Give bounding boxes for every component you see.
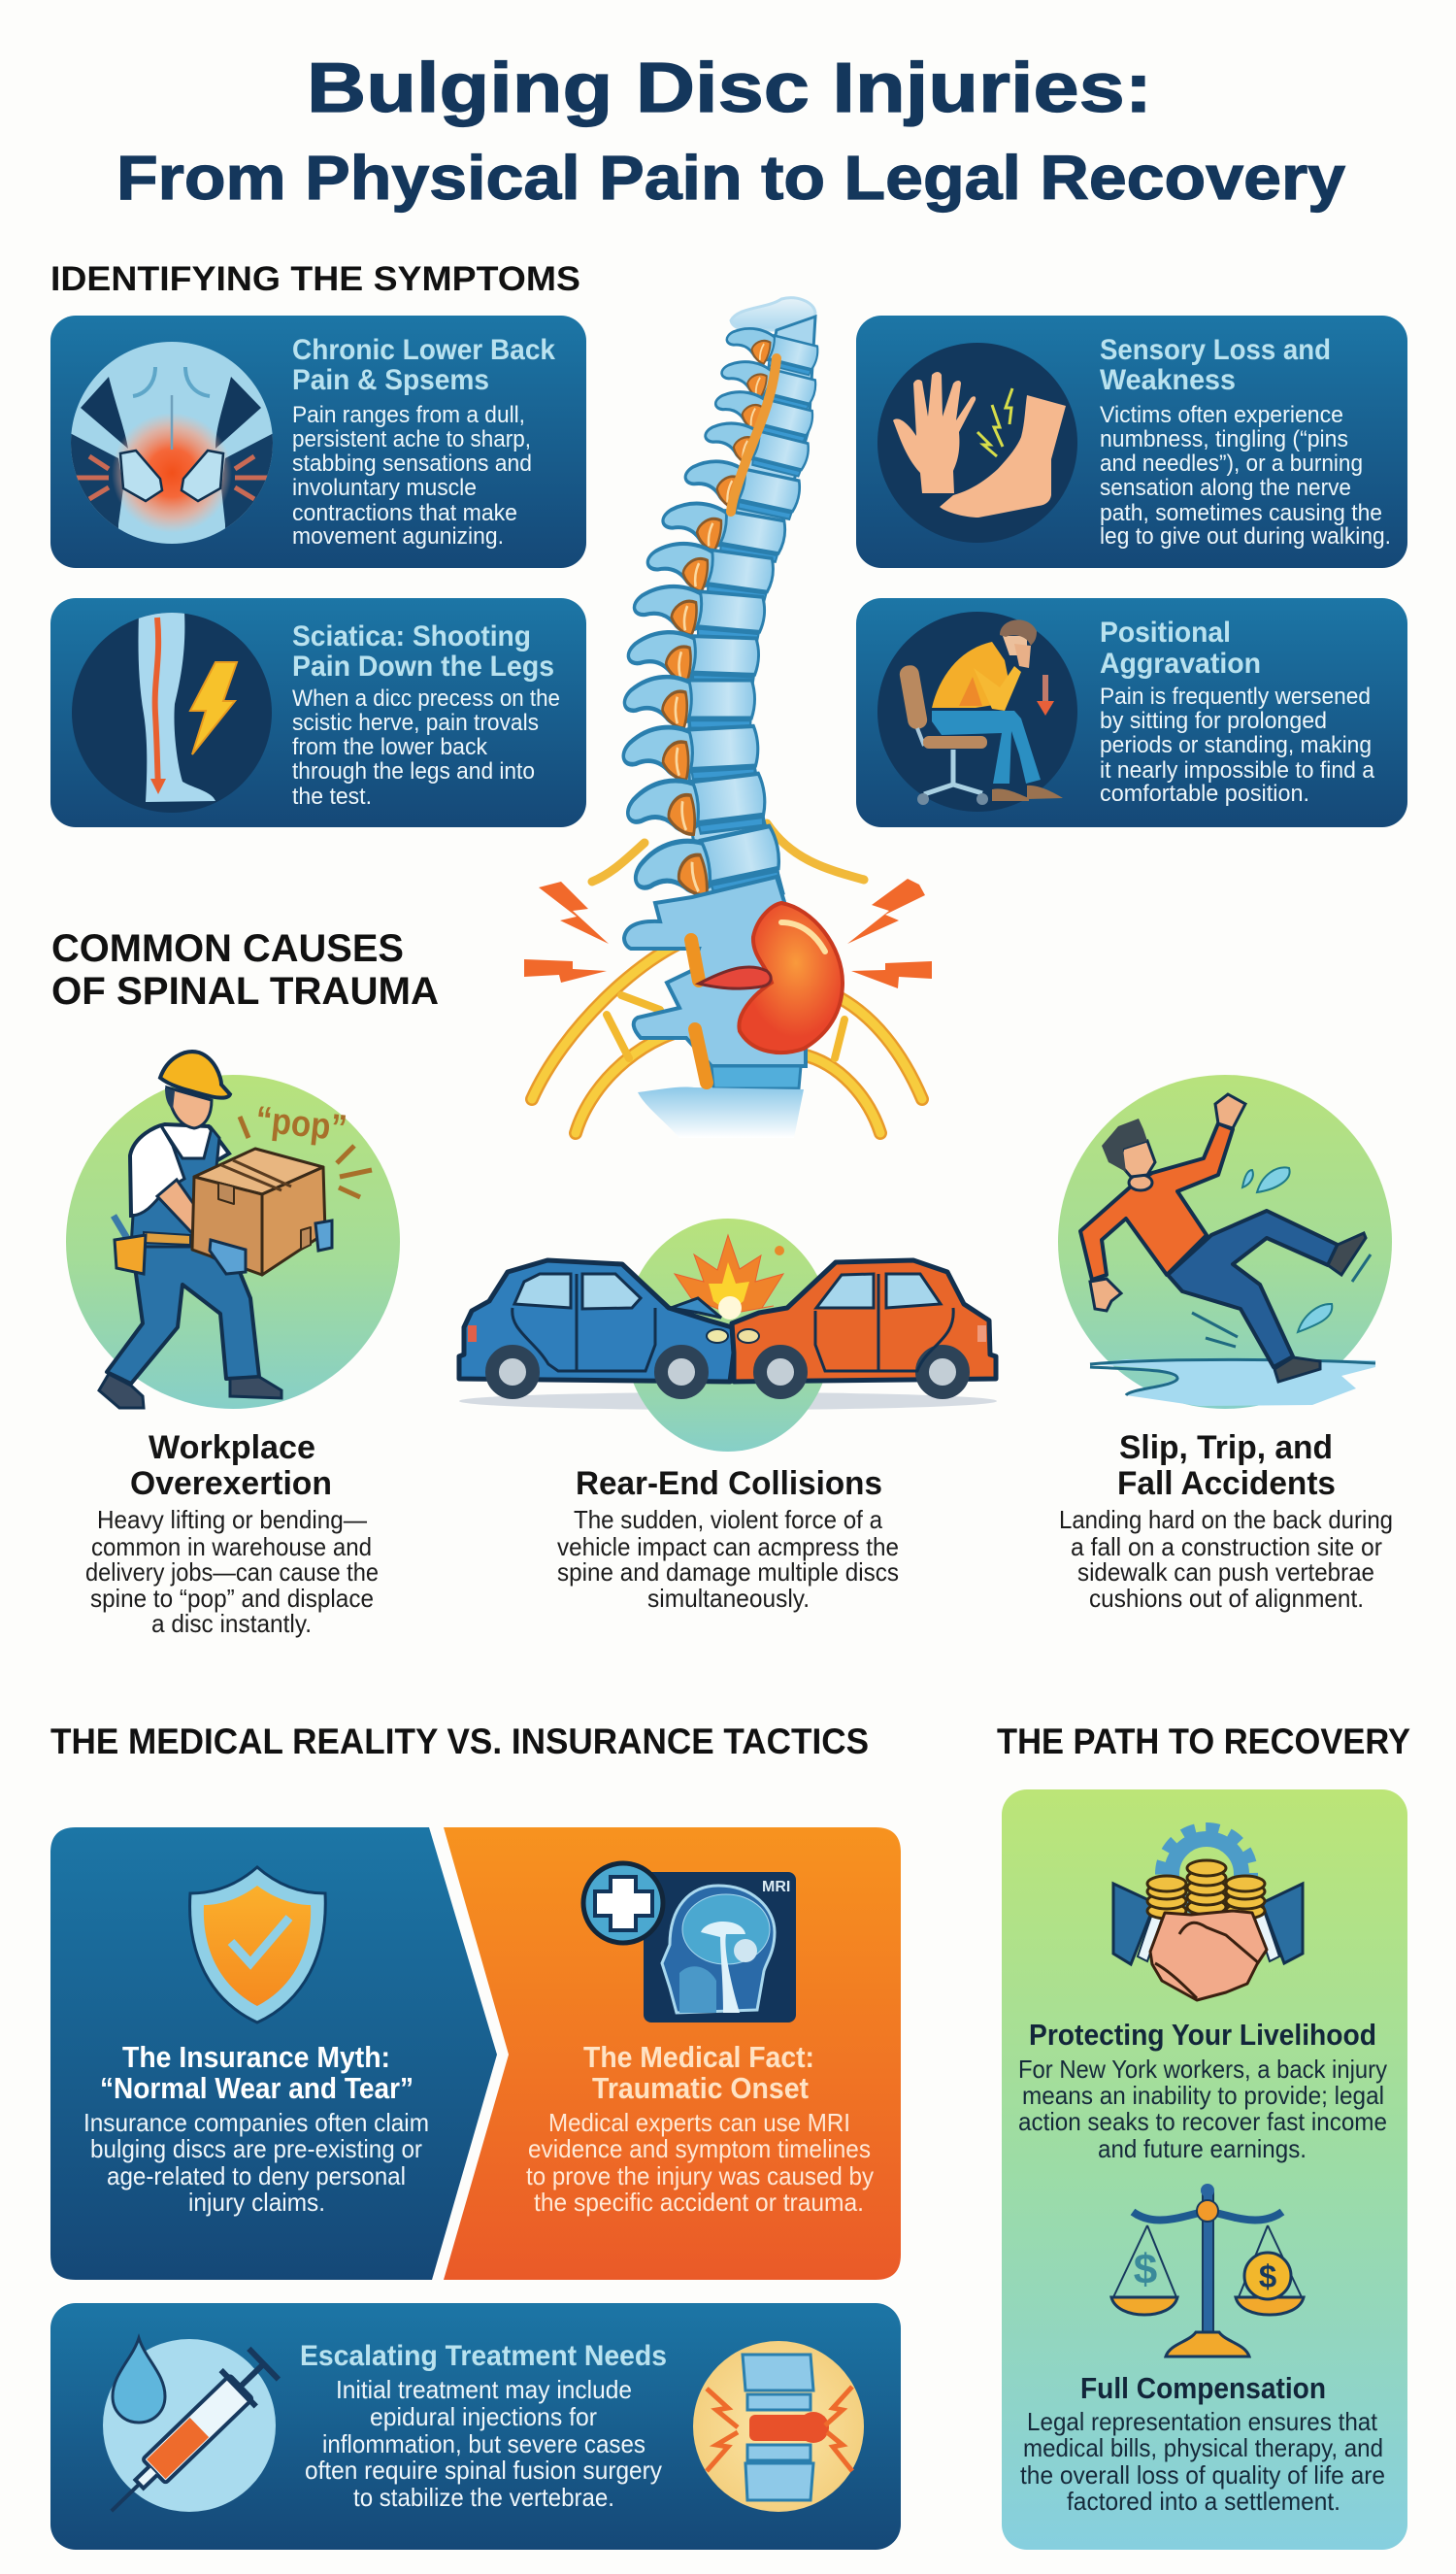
recovery text: For New York workers, a back injury [1018,2055,1387,2084]
card text: sensation along the nerve [1100,475,1351,501]
card text: When a dicc precess on the [292,685,560,712]
fact text: to prove the injury was caused by [526,2161,874,2190]
card text: persistent ache to sharp, [292,426,531,452]
cause: workplace overexertion: delivery jobs—can cause the [85,1557,379,1587]
hard hat [160,1052,230,1098]
cause: workplace overexertion: Workplace [149,1429,315,1466]
strain marks [240,1117,372,1197]
disc tongue [699,967,771,988]
lower disc ring [711,1066,801,1088]
torso and arms [1080,1123,1233,1280]
icon: mri scan: MRI [762,1879,790,1895]
icon: shield with check [190,1867,325,2022]
heading: medical reality vs insurance: THE MEDICAL REALITY VS. INSURANCE TACTICS [50,1722,869,1761]
cause: rear-end collisions: Rear-End Collisions [576,1465,882,1502]
card heading: Sensory Loss and [1100,334,1331,366]
box [192,1149,325,1275]
orange car lights [977,1325,986,1342]
panel: path to recovery [1002,1789,1407,2550]
card text: contractions that make [292,500,517,526]
puddle [1090,1359,1375,1406]
title: From Physical Pain to Legal Recovery [116,143,1345,213]
hair [1102,1119,1147,1172]
card text: Pain is frequently wersened [1100,684,1371,710]
treatment heading: Escalating Treatment Needs [300,2340,667,2372]
motion lines [1192,1254,1371,1347]
card heading: Chronic Lower Back [292,334,555,366]
orange car [732,1260,996,1382]
debris dot [775,1246,784,1255]
blue car lights [468,1325,477,1342]
treatment text: Initial treatment may include [336,2375,632,2404]
fact heading: The Medical Fact: [583,2040,814,2074]
illustration: workplace overexertion [66,1052,400,1409]
card heading: Pain & Spsems [292,364,489,396]
card heading: Sciatica: Shooting [292,620,531,652]
cause: slip, trip and fall: sidewalk can push vertebrae [1077,1557,1374,1587]
blue car [459,1260,734,1382]
treatment text: inflommation, but severe cases [322,2429,645,2458]
bulge highlight [781,922,825,952]
cause: rear-end collisions [557,1465,899,1613]
card text: Pain ranges from a dull, [292,402,525,428]
lower lumbar [624,877,806,1066]
cause: slip, trip and fall: Landing hard on the back during [1059,1505,1393,1534]
treatment text [305,2375,662,2512]
spinal cord [731,358,777,512]
card heading [1100,617,1261,680]
shoes [1274,1233,1366,1382]
illustration: spine with bulging disc [524,298,932,1138]
panel: medical fact [444,1827,901,2280]
card text [292,685,560,810]
myth heading: The Insurance Myth: [122,2040,390,2074]
card heading: Aggravation [1100,648,1261,680]
card text: the test. [292,784,372,810]
door lines [513,1274,953,1371]
fact heading: Traumatic Onset [592,2071,809,2105]
gloves [210,1220,332,1274]
panel: sensory loss [856,316,1407,568]
card text: numbness, tingling (“pins [1100,426,1348,452]
lightning bolts [524,879,932,988]
cause: workplace overexertion: spine to “pop” and displace [90,1584,374,1613]
card text: and needles”), or a burning [1100,451,1363,477]
recovery heading: Protecting Your Livelihood [1029,2018,1376,2052]
card text: by sitting for prolonged [1100,708,1327,734]
panel: escalating treatment [50,2303,901,2550]
shadow [459,1392,997,1410]
crumpled hood [671,1298,721,1318]
fact text: the specific accident or trauma. [534,2188,864,2217]
fact heading [583,2040,814,2105]
title [116,50,1345,213]
heading: common causes [51,927,439,1013]
orange root [691,940,707,1083]
myth text: bulging discs are pre-existing or [90,2134,422,2163]
icon: lower back with glowing pain [71,342,273,544]
cause: rear-end collisions: spine and damage multiple discs [557,1557,899,1587]
card text: path, sometimes causing the [1100,500,1382,526]
vertebrae [622,317,820,909]
blue car windows [514,1274,641,1309]
icon: leg with lightning [72,612,272,813]
cause: slip, trip and fall: cushions out of alignment. [1089,1584,1364,1613]
compensation text: medical bills, physical therapy, and [1023,2433,1383,2462]
card text [1100,402,1391,550]
illustration: slip and fall [1058,1075,1392,1409]
icon: person hunched on chair [877,612,1077,812]
treatment text: often require spinal fusion surgery [305,2456,662,2485]
cause: rear-end collisions: The sudden, violent force of a [574,1505,882,1534]
card text: Victims often experience [1100,402,1343,428]
myth text: injury claims. [188,2188,325,2217]
compensation heading: Full Compensation [1080,2371,1326,2405]
worker pants [107,1245,259,1384]
panel: chronic lower back pain [50,316,586,568]
recovery text: means an inability to provide; legal [1022,2081,1384,2110]
myth text: age-related to deny personal [107,2161,406,2190]
treatment text: epidural injections for [370,2402,597,2431]
fact text: Medical experts can use MRI [548,2108,850,2137]
fact text: evidence and symptom timelines [528,2134,871,2163]
card text [292,402,532,550]
treatment text: to stabilize the vertebrae. [353,2483,614,2512]
herniated bulge [739,903,843,1053]
heading: identifying the symptoms: IDENTIFYING THE SYMPTOMS [50,260,580,298]
card heading: Positional [1100,617,1231,649]
card heading [292,334,555,396]
icon: mri scan [583,1863,796,2022]
card text: scistic herve, pain trovals [292,710,539,736]
card text: involuntary muscle [292,475,477,501]
neck [1129,1175,1152,1190]
cause: slip, trip and fall [1059,1429,1393,1613]
head [167,1087,212,1128]
compensation text [1020,2407,1385,2516]
cause: slip, trip and fall: Slip, Trip, and [1119,1429,1333,1466]
wheels [492,1352,963,1392]
card text: comfortable position. [1100,781,1309,807]
heading: common causes: OF SPINAL TRAUMA [51,970,439,1013]
icon: balance scales: $ [1134,2246,1157,2293]
cause: workplace overexertion: Heavy lifting or bending— [97,1505,367,1534]
icon: syringe and drop [94,2338,281,2529]
icon: spinal fusion [693,2341,864,2512]
recovery text [1018,2055,1387,2163]
overalls bib [131,1124,219,1247]
card text: it nearly impossible to find a [1100,757,1375,784]
card text: leg to give out during walking. [1100,523,1391,550]
cause: workplace overexertion: common in warehouse and [91,1532,372,1561]
panel: insurance myth [50,1827,497,2280]
icon: balance scales: $ [1259,2258,1276,2294]
cause: slip, trip and fall: Fall Accidents [1117,1465,1336,1502]
pop callout: “pop” [253,1099,348,1150]
recovery text: action seaks to recover fast income [1018,2107,1387,2136]
card text: movement agunizing. [292,523,504,550]
hands [1090,1094,1245,1311]
card heading [1100,334,1331,396]
cause: rear-end collisions: vehicle impact can acmpress the [557,1532,899,1561]
card text [1100,684,1375,807]
worker shirt [130,1124,229,1216]
nerves [532,823,922,1133]
myth heading: “Normal Wear and Tear” [100,2071,414,2105]
belt and pouch [144,1232,190,1245]
recovery text: and future earnings. [1098,2134,1307,2163]
compensation text: factored into a settlement. [1067,2487,1340,2516]
explosion [675,1235,783,1314]
illustration: car collision [459,1219,997,1452]
head [1119,1141,1155,1177]
cause: workplace overexertion [85,1429,379,1638]
icon: handshake with coins [1113,1827,1303,2000]
forearm [157,1180,215,1248]
panel: positional aggravation [856,598,1407,827]
card text: from the lower back [292,734,488,760]
card heading [292,620,554,683]
card text: stabbing sensations and [292,451,532,477]
compensation text: Legal representation ensures that [1027,2407,1378,2436]
fact text [526,2108,874,2217]
cause: workplace overexertion: Overexertion [130,1465,332,1502]
orange car windows [816,1274,941,1308]
icon: hand and foot [877,343,1077,543]
card text: through the legs and into [292,758,535,785]
cause: slip, trip and fall: a fall on a construction site or [1071,1532,1382,1561]
water drops [1242,1167,1332,1332]
sacrum fade [638,1086,804,1138]
heading: path to recovery: THE PATH TO RECOVERY [997,1722,1410,1761]
myth heading [100,2040,414,2105]
worker boots [99,1374,281,1408]
icon: balance scales [1111,2184,1304,2357]
skull base [731,298,815,331]
pants [1168,1211,1338,1367]
cause: workplace overexertion: a disc instantly. [151,1609,312,1638]
compensation text: the overall loss of quality of life are [1020,2460,1385,2490]
myth text [83,2108,429,2217]
title: Bulging Disc Injuries: [307,50,1152,127]
heading: common causes: COMMON CAUSES [51,927,404,970]
panel: sciatica [50,598,586,827]
card text: periods or standing, making [1100,732,1372,758]
cause: rear-end collisions: simultaneously. [647,1584,810,1613]
card heading: Pain Down the Legs [292,651,554,683]
myth text: Insurance companies often claim [83,2108,429,2137]
card heading: Weakness [1100,364,1236,396]
